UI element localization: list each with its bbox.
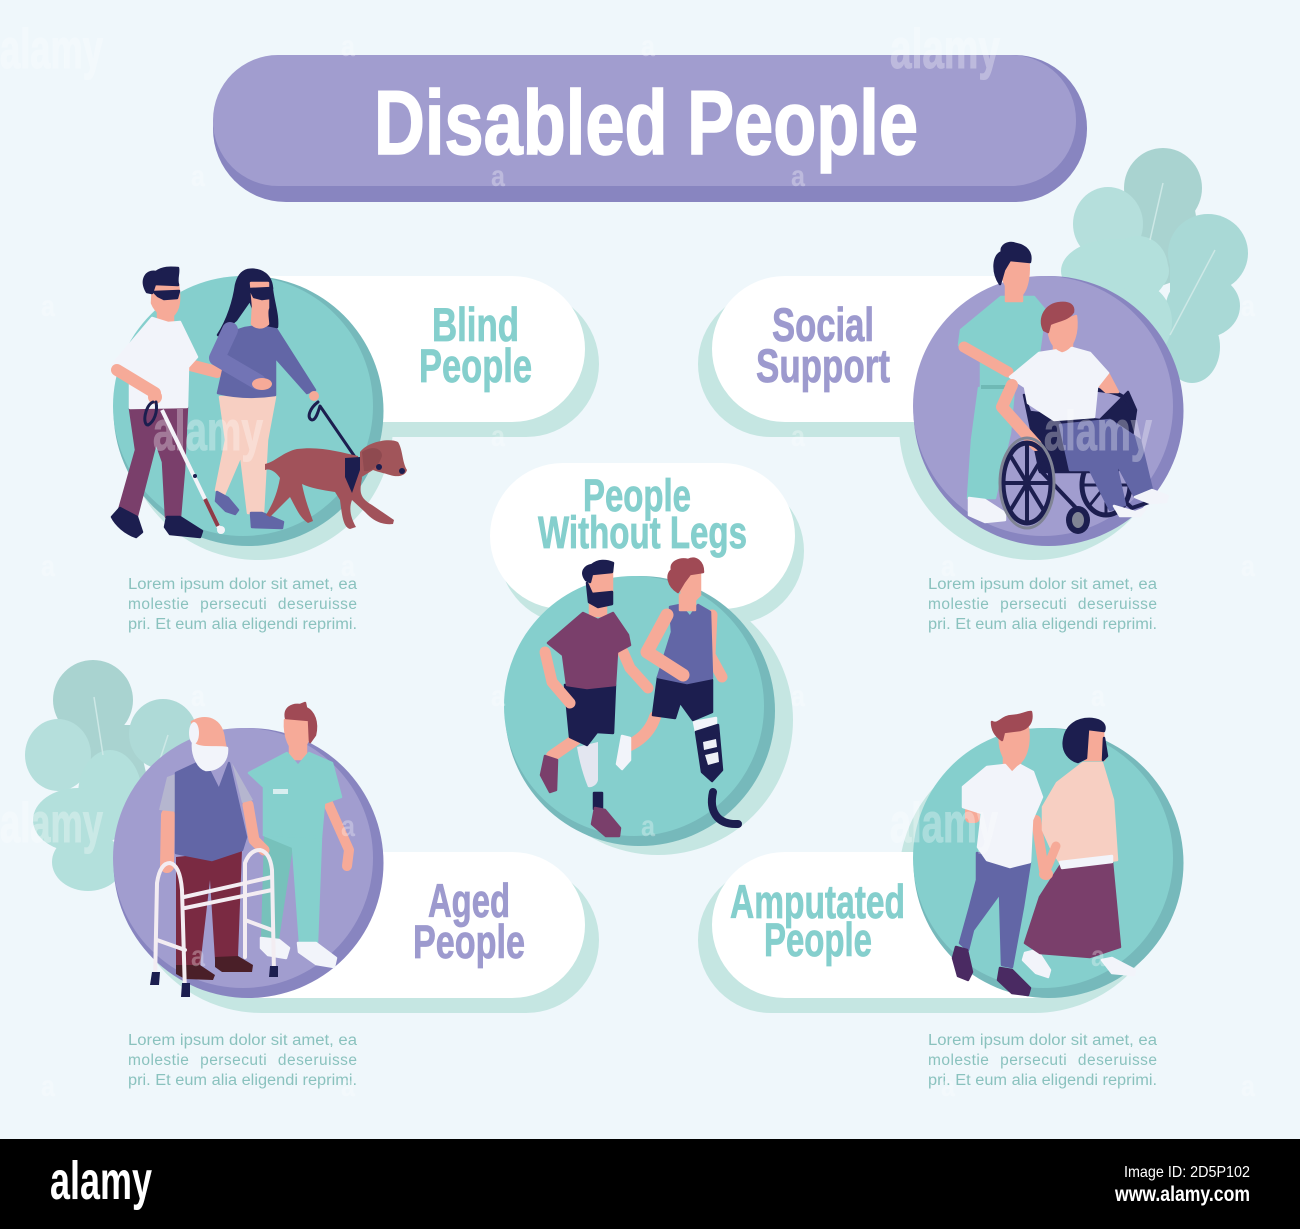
heading: blind people <box>419 298 532 392</box>
text block: aged people: Lorem ipsum dolor sit amet, ea <box>128 1032 357 1049</box>
image id: Image ID: 2D5P102 <box>1124 1164 1250 1181</box>
watermarks: a <box>641 30 655 63</box>
heading: social support: Social <box>772 298 874 351</box>
panel: people without legs <box>490 463 804 855</box>
watermarks: a <box>491 680 505 713</box>
text block: amputated people: molestie persecuti deseruisse <box>928 1052 1157 1069</box>
watermarks: a <box>1241 290 1255 323</box>
watermarks: a <box>41 290 55 323</box>
text block: amputated people: Lorem ipsum dolor sit amet, ea <box>928 1032 1157 1049</box>
decorative leaves: top right <box>1061 148 1248 383</box>
watermarks: a <box>791 160 805 193</box>
watermarks: a <box>341 30 355 63</box>
text block: aged people: pri. Et eum alia eligendi reprimi. <box>128 1072 357 1089</box>
figure: blind man with cane <box>112 268 225 537</box>
watermarks: a <box>41 550 55 583</box>
text block: aged people: molestie persecuti deseruisse <box>128 1052 357 1069</box>
heading: aged people: Aged <box>428 874 510 927</box>
text block: blind people: pri. Et eum alia eligendi reprimi. <box>128 616 357 633</box>
heading: aged people <box>413 874 525 968</box>
footer logo: alamy <box>50 1151 152 1211</box>
watermarks: a <box>791 680 805 713</box>
heading: amputated people <box>730 875 905 966</box>
text block: social support: pri. Et eum alia eligendi reprimi. <box>928 616 1157 633</box>
watermarks: a <box>191 680 205 713</box>
heading: people without legs <box>538 470 747 558</box>
website: www.alamy.com <box>1114 1183 1250 1206</box>
watermarks: a <box>791 420 805 453</box>
figure: caregiver <box>959 243 1045 522</box>
watermarks: a <box>1091 940 1105 973</box>
text block: amputated people <box>928 1032 1157 1089</box>
watermarks: a <box>491 160 505 193</box>
title banner <box>213 55 1087 202</box>
text block: blind people: Lorem ipsum dolor sit amet, ea <box>128 576 357 593</box>
heading: blind people: Blind <box>432 298 519 351</box>
figure: runner with blade prosthesis <box>617 559 738 824</box>
text block: social support: Lorem ipsum dolor sit amet, ea <box>928 576 1157 593</box>
heading: people without legs: Without Legs <box>538 507 747 558</box>
panel: amputated people <box>698 712 1184 1013</box>
watermarks: a <box>941 1070 955 1103</box>
figure: wheelchair user <box>1000 303 1168 534</box>
heading: amputated people: People <box>764 913 872 966</box>
heading: social support <box>756 298 890 392</box>
text block: blind people <box>128 576 357 633</box>
watermarks: a <box>191 940 205 973</box>
watermarks: a <box>341 1070 355 1103</box>
title text: Disabled People <box>374 73 918 174</box>
figure: runner with leg prosthesis <box>541 561 648 836</box>
watermarks: a <box>941 550 955 583</box>
figure: elderly man with walker <box>150 718 278 997</box>
watermarks: a <box>491 420 505 453</box>
panel: social support <box>698 243 1184 560</box>
heading: aged people: People <box>413 915 525 968</box>
panel: aged people <box>113 703 599 1013</box>
figure: man with amputated arm <box>953 712 1044 995</box>
watermarks: alamy <box>890 791 998 854</box>
text block: blind people: molestie persecuti deseruisse <box>128 596 357 613</box>
watermarks: alamy <box>0 791 103 854</box>
figure: woman with skirt <box>1023 719 1135 977</box>
watermarks: a <box>191 160 205 193</box>
decorative leaves: bottom left <box>25 660 197 891</box>
watermarks: a <box>1241 550 1255 583</box>
watermarks: alamy <box>153 399 263 462</box>
watermarks: alamy <box>0 17 103 80</box>
panel: blind people <box>112 268 599 560</box>
figure: guide dog on leash <box>265 402 407 529</box>
text block: aged people <box>128 1032 357 1089</box>
text block: social support <box>928 576 1157 633</box>
heading: amputated people: Amputated <box>730 875 905 928</box>
watermarks: a <box>341 550 355 583</box>
heading: social support: Support <box>756 339 890 392</box>
text block: social support: molestie persecuti deseruisse <box>928 596 1157 613</box>
watermarks: alamy <box>890 17 1000 80</box>
watermarks: a <box>41 1070 55 1103</box>
watermarks: a <box>1241 1070 1255 1103</box>
watermarks: alamy <box>1044 399 1152 462</box>
footer bar <box>0 1139 1300 1229</box>
heading: people without legs: People <box>583 470 691 521</box>
figure: blind woman <box>216 270 319 528</box>
watermarks: a <box>1091 680 1105 713</box>
watermarks: a <box>641 810 655 843</box>
heading: blind people: People <box>419 339 532 392</box>
watermarks: a <box>341 810 355 843</box>
text block: amputated people: pri. Et eum alia eligendi reprimi. <box>928 1072 1157 1089</box>
figure: caregiver nurse <box>249 703 349 967</box>
